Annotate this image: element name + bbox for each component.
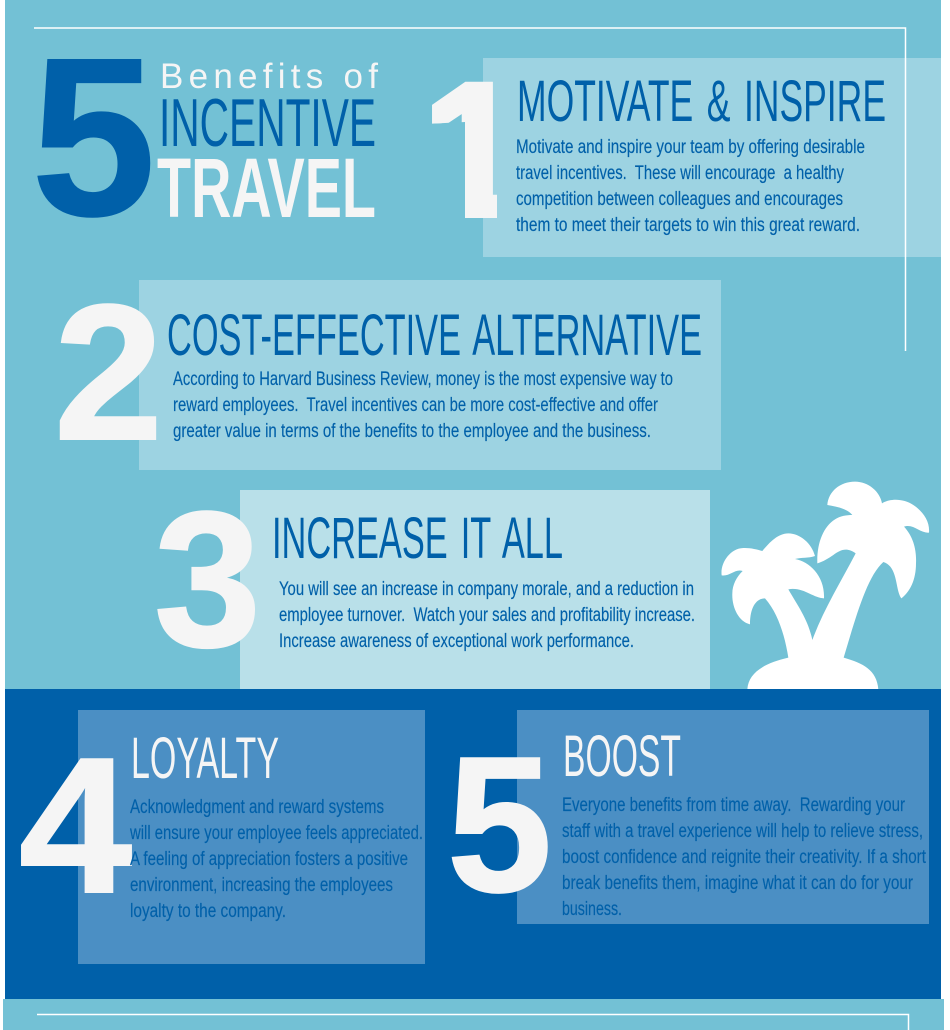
- panel: motivate background: [483, 58, 941, 257]
- body text: them to meet their targets to win this great reward.: [516, 215, 860, 236]
- body text: travel incentives. These will encourage a healthy: [516, 163, 844, 184]
- panel background: [240, 490, 710, 689]
- title line: INCENTIVE: INCENTIVE: [159, 85, 376, 161]
- heading: BOOST: [563, 724, 681, 789]
- dark blue band: [5, 689, 941, 1000]
- title: [31, 10, 378, 263]
- body text: [516, 137, 865, 236]
- bottom teal strip: [3, 999, 944, 1030]
- frame: top right: [34, 28, 906, 351]
- panel background: [517, 710, 929, 924]
- panel background: [139, 280, 721, 470]
- icon: palm trees on island: [721, 482, 929, 689]
- benefit 4: loyalty: [19, 710, 425, 964]
- body text: According to Harvard Business Review, money is the most expensive way to: [173, 369, 673, 390]
- body text: employee turnover. Watch your sales and profitability increase.: [279, 605, 695, 626]
- body text: greater value in terms of the benefits to the employee and the business.: [173, 421, 651, 442]
- title line: Benefits of: Benefits of: [160, 57, 378, 96]
- body text: Increase awareness of exceptional work performance.: [279, 631, 634, 652]
- body text: Acknowledgment and reward systems: [130, 797, 384, 818]
- body text: environment, increasing the employees: [130, 875, 393, 896]
- body text: will ensure your employee feels appreciated.: [129, 823, 423, 844]
- body text: loyalty to the company.: [130, 901, 286, 922]
- panel background: [78, 710, 425, 964]
- numeral 3: 3: [154, 471, 261, 687]
- body text: [562, 795, 927, 920]
- numeral 4: 4: [19, 717, 132, 933]
- benefit 3: increase it all: [154, 471, 710, 689]
- frame: bottom: [37, 1014, 908, 1030]
- numeral 1: 1: [423, 43, 523, 259]
- body text: A feeling of appreciation fosters a positive: [130, 849, 408, 870]
- body text: Motivate and inspire your team by offering desirable: [516, 137, 865, 158]
- body text: [173, 369, 673, 442]
- heading: INCREASE IT ALL: [272, 506, 563, 571]
- body text: business.: [562, 899, 622, 920]
- body text: [279, 579, 695, 652]
- title numeral 5: 5: [31, 10, 156, 263]
- numeral 5: 5: [447, 716, 552, 932]
- body text: reward employees. Travel incentives can be more cost-effective and offer: [173, 395, 659, 416]
- title line: TRAVEL: TRAVEL: [157, 141, 376, 235]
- heading: LOYALTY: [131, 726, 279, 791]
- body text: [129, 797, 423, 922]
- benefit 2: cost-effective alternative: [54, 264, 721, 480]
- numeral 2: 2: [54, 264, 163, 480]
- body text: You will see an increase in company morale, and a reduction in: [279, 579, 694, 600]
- benefit 5: boost: [447, 710, 929, 932]
- body text: competition between colleagues and encourages: [516, 189, 843, 210]
- benefit 1: motivate and inspire: [432, 80, 885, 236]
